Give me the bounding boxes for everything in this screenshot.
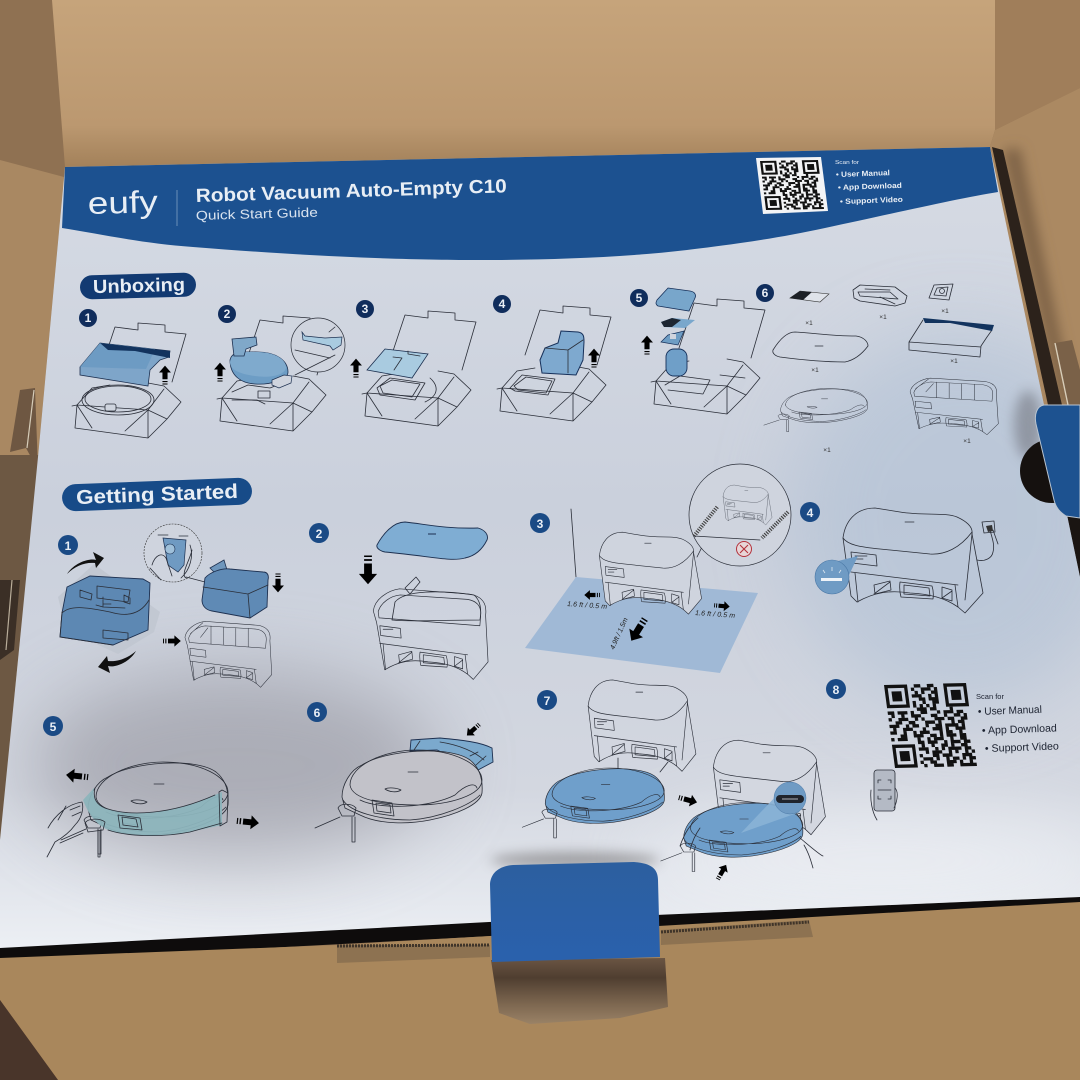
clearance arrows and distances: 1.6 ft / 0.5 m bbox=[567, 601, 607, 611]
bumper being removed bbox=[83, 788, 222, 836]
filter accessory: ×1 bbox=[805, 320, 813, 327]
unboxing step 1 bbox=[72, 309, 186, 438]
robot outline bbox=[764, 389, 867, 454]
front blue tab bbox=[490, 862, 660, 962]
clearance arrows and distances bbox=[567, 590, 735, 651]
phone in hand bbox=[871, 770, 897, 820]
getting started step 2: 2 bbox=[316, 527, 323, 541]
inset: filter removal bbox=[144, 524, 202, 582]
getting started step 5: 5 bbox=[50, 720, 57, 734]
product title: Robot Vacuum Auto-Empty C10 bbox=[195, 176, 507, 207]
floor clearance area bbox=[525, 577, 758, 673]
unboxing step 2: 2 bbox=[224, 307, 231, 321]
unboxing step 5: 5 bbox=[636, 291, 643, 305]
open station outline bbox=[910, 378, 998, 445]
getting started step 6 bbox=[307, 702, 493, 842]
right slit in flap bbox=[661, 920, 813, 945]
eufy logo: eufy bbox=[87, 184, 159, 221]
getting started step 4 bbox=[800, 502, 998, 613]
dark corner below flap bbox=[0, 1000, 58, 1080]
wall line bbox=[571, 509, 576, 577]
heading: Getting Started: Getting Started bbox=[76, 481, 238, 509]
scan list bbox=[976, 692, 1059, 755]
unboxing step 6: package contents: 6 bbox=[762, 286, 769, 300]
getting started step 7: 7 bbox=[544, 694, 551, 708]
header band bbox=[62, 147, 998, 260]
logo divider bbox=[176, 190, 178, 226]
header scan list: • User Manual bbox=[836, 168, 890, 179]
station bbox=[373, 589, 488, 679]
scan list: Scan for bbox=[976, 692, 1004, 701]
header scan list: • Support Video bbox=[840, 195, 903, 206]
header scan list bbox=[835, 160, 903, 206]
top cover box bbox=[909, 318, 994, 365]
right blue tab bbox=[1035, 405, 1080, 518]
unboxing step 2 bbox=[214, 305, 345, 431]
power plug and cable bbox=[977, 521, 998, 561]
station and robot aligned bbox=[588, 680, 696, 771]
getting started step 1 bbox=[58, 524, 284, 687]
getting started step 8: 8 bbox=[833, 683, 840, 697]
getting started step 3 bbox=[525, 464, 791, 673]
open station bbox=[185, 621, 272, 687]
mat outline: ×1 bbox=[811, 367, 819, 374]
inset: do not place in clutter bbox=[689, 464, 791, 566]
scan list: • App Download bbox=[982, 722, 1057, 737]
unboxing step 5 bbox=[630, 288, 765, 414]
unboxing step 6: package contents bbox=[756, 284, 998, 454]
open station outline: ×1 bbox=[963, 438, 971, 445]
dust box insert bbox=[410, 738, 493, 770]
panel: quick start guide sheet bbox=[0, 147, 1080, 948]
scan list: • User Manual bbox=[978, 704, 1042, 718]
unboxing step 1: 1 bbox=[85, 311, 92, 325]
subtitle: Quick Start Guide bbox=[196, 205, 318, 223]
front box flap bbox=[0, 902, 1080, 1080]
dust bin bbox=[202, 560, 268, 618]
getting started step 1: 1 bbox=[65, 539, 72, 553]
getting started step 8 bbox=[826, 679, 1059, 820]
top cover box: ×1 bbox=[950, 358, 958, 365]
rotation ghost bbox=[58, 564, 160, 654]
heading: Unboxing bbox=[80, 272, 196, 300]
right inner wall of the box bbox=[990, 88, 1080, 585]
app QR code bbox=[884, 683, 977, 768]
cutout below front tab bbox=[491, 958, 668, 1024]
robot outline: ×1 bbox=[823, 447, 831, 454]
mat lowered onto station bbox=[377, 522, 488, 559]
heading: Unboxing: Unboxing bbox=[93, 275, 185, 298]
header QR code bbox=[756, 157, 828, 214]
shadow band under the sheet bbox=[0, 890, 1080, 962]
getting started step 6: 6 bbox=[314, 706, 321, 720]
status light callout bbox=[815, 556, 858, 594]
header scan list: Scan for bbox=[835, 160, 859, 166]
getting started step 2 bbox=[309, 522, 488, 679]
flipped station bbox=[60, 576, 150, 645]
heading: Getting Started bbox=[62, 477, 252, 512]
hands pushing robot bbox=[680, 818, 823, 868]
hand bbox=[47, 802, 83, 857]
top right wood corner bbox=[995, 0, 1080, 130]
clearance arrows and distances: 4.9ft / 1.5m bbox=[609, 617, 630, 651]
rotate arrows bbox=[67, 552, 104, 574]
getting started step 7 bbox=[522, 680, 825, 882]
box lid flap bbox=[52, 0, 995, 167]
unboxing step 4 bbox=[493, 295, 611, 421]
brush accessory bbox=[853, 285, 907, 321]
dark circle behind right tab bbox=[1020, 439, 1080, 503]
filter accessory bbox=[790, 291, 829, 327]
station bbox=[599, 532, 702, 614]
getting started step 3: 3 bbox=[537, 517, 544, 531]
dust bag card bbox=[929, 284, 953, 315]
clearance arrows and distances: 1.6 ft / 0.5 m bbox=[695, 610, 735, 620]
header scan list: • App Download bbox=[838, 181, 902, 192]
brush accessory: ×1 bbox=[879, 314, 887, 321]
left inner wall of the box bbox=[0, 160, 64, 850]
left slit in flap bbox=[337, 945, 490, 963]
scan list: • Support Video bbox=[985, 740, 1059, 755]
unboxing step 3 bbox=[350, 300, 476, 426]
unboxing step 4: 4 bbox=[499, 297, 506, 311]
indicator callout bbox=[741, 782, 806, 833]
mat outline bbox=[773, 332, 868, 374]
station and robot docked bbox=[713, 740, 825, 835]
dust bag card: ×1 bbox=[941, 308, 949, 315]
unboxing step 3: 3 bbox=[362, 302, 369, 316]
getting started step 4: 4 bbox=[807, 506, 814, 520]
getting started step 5 bbox=[43, 716, 260, 857]
